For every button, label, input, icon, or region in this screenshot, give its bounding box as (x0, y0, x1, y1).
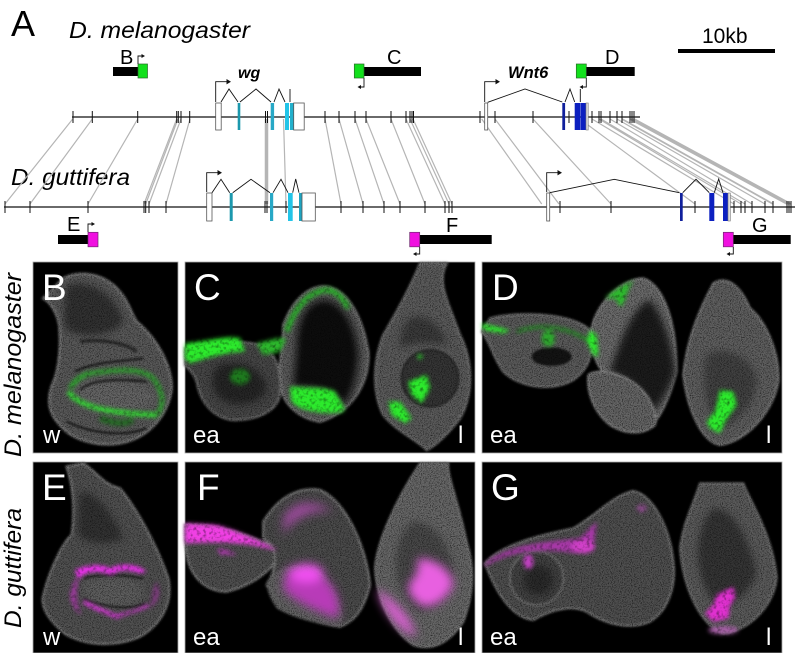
panel G: eye-antennal and leg discs magenta: l (766, 624, 771, 651)
panel E: wing disc magenta (33, 462, 178, 653)
enhancer construct D: D (605, 47, 619, 69)
magenta signal (70, 565, 159, 618)
D. guttifera gene track (4, 170, 795, 221)
enhancer construct G (723, 215, 791, 256)
homology connector lines (5, 119, 791, 204)
panel D: eye-antennal and leg discs green (482, 262, 782, 453)
enhancer construct E: E (67, 214, 80, 236)
disc tissue (482, 278, 778, 445)
panel A: gene maps (4, 3, 795, 256)
species label: D. melanogaster: D. melanogaster (69, 17, 251, 43)
panel C: eye-antennal and leg discs green: C (194, 267, 221, 308)
panel F: eye-antennal and leg discs magenta: ea (193, 624, 220, 651)
green signal (482, 280, 737, 433)
scale bar 10kb (678, 25, 775, 53)
enhancer construct E (58, 214, 98, 247)
wg gene model (guttifera) (207, 170, 315, 221)
Wnt6 gene label: Wnt6 (508, 64, 549, 82)
enhancer construct B (113, 47, 148, 78)
panel D: eye-antennal and leg discs green: D (492, 267, 519, 308)
wing disc tissue (43, 274, 172, 444)
enhancer construct C: C (387, 47, 401, 69)
panel E: wing disc magenta: E (42, 467, 67, 508)
panel D: eye-antennal and leg discs green: l (766, 422, 771, 449)
panel C: eye-antennal and leg discs green: ea (193, 422, 220, 449)
enhancer construct G: G (752, 215, 768, 237)
wing disc green signal (68, 370, 162, 423)
enhancer construct D (576, 47, 635, 89)
panel letter A: A (11, 3, 35, 44)
row label: D. guttifera: D. guttifera (0, 508, 27, 628)
enhancer construct F: F (446, 215, 458, 237)
scale bar 10kb: 10kb (702, 25, 748, 48)
magenta signal (185, 523, 278, 555)
magenta signal (485, 504, 738, 634)
disc tissue (185, 463, 472, 647)
D. melanogaster gene track (72, 64, 640, 130)
Wnt6 gene model (guttifera) (547, 170, 730, 221)
wg gene model (216, 79, 304, 130)
panel B: wing disc green: w (42, 422, 61, 449)
panel F: eye-antennal and leg discs magenta: l (458, 624, 463, 651)
panel C: eye-antennal and leg discs green: l (458, 422, 463, 449)
enhancer construct C (354, 47, 421, 89)
disc tissue (185, 263, 470, 450)
green signal (185, 290, 430, 423)
wing disc tissue (43, 463, 169, 644)
disc tissue (485, 483, 777, 633)
panel F: eye-antennal and leg discs magenta: F (197, 467, 220, 508)
panel G: eye-antennal and leg discs magenta: ea (490, 624, 517, 651)
panel D: eye-antennal and leg discs green: ea (490, 422, 517, 449)
panel C: eye-antennal and leg discs green (185, 262, 475, 453)
panel G: eye-antennal and leg discs magenta: G (491, 467, 520, 508)
panel B: wing disc green: B (42, 267, 67, 308)
panel G: eye-antennal and leg discs magenta (482, 462, 782, 653)
Wnt6 gene model (485, 79, 588, 130)
panel E: wing disc magenta: w (42, 624, 61, 651)
panel F: eye-antennal and leg discs magenta (185, 462, 475, 653)
enhancer construct F (410, 215, 492, 256)
species label: D. guttifera: D. guttifera (11, 164, 130, 190)
row label: D. melanogaster: D. melanogaster (0, 272, 27, 457)
enhancer construct B: B (120, 47, 133, 69)
panel B: wing disc green (33, 262, 178, 453)
wg gene label: wg (238, 65, 260, 82)
